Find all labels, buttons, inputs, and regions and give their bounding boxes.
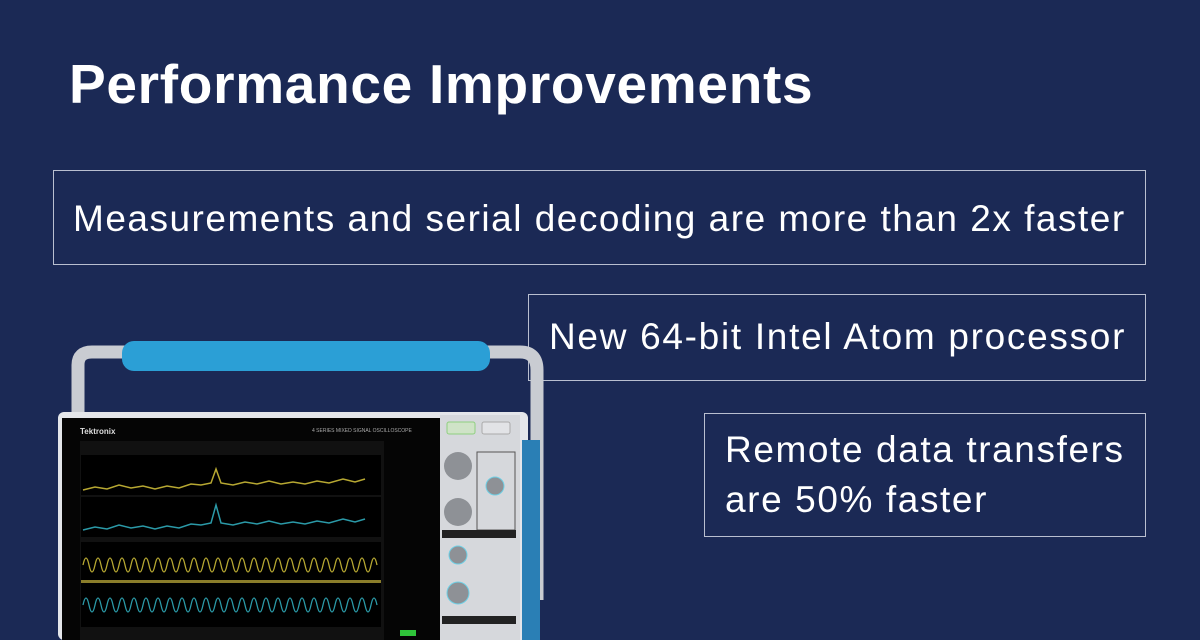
title: Performance Improvements: [69, 53, 813, 115]
scope body: 4 SERIES MIXED SIGNAL OSCILLOSCOPE: [312, 428, 413, 434]
callout: processor: [528, 294, 1146, 381]
handle frame: [78, 352, 537, 600]
callout: measurements: [53, 170, 1146, 265]
scope body: Tektronix: [80, 427, 116, 436]
callout: measurements: Measurements and serial decoding are more than 2x faster: [73, 198, 1126, 239]
callout: remote transfers: Remote data transfers: [725, 429, 1125, 470]
handle grip: [122, 341, 490, 371]
callout: processor: New 64-bit Intel Atom processor: [549, 316, 1126, 357]
callout: remote transfers: are 50% faster: [725, 479, 988, 520]
callout: remote transfers: [704, 413, 1146, 537]
scope body: [58, 412, 540, 640]
